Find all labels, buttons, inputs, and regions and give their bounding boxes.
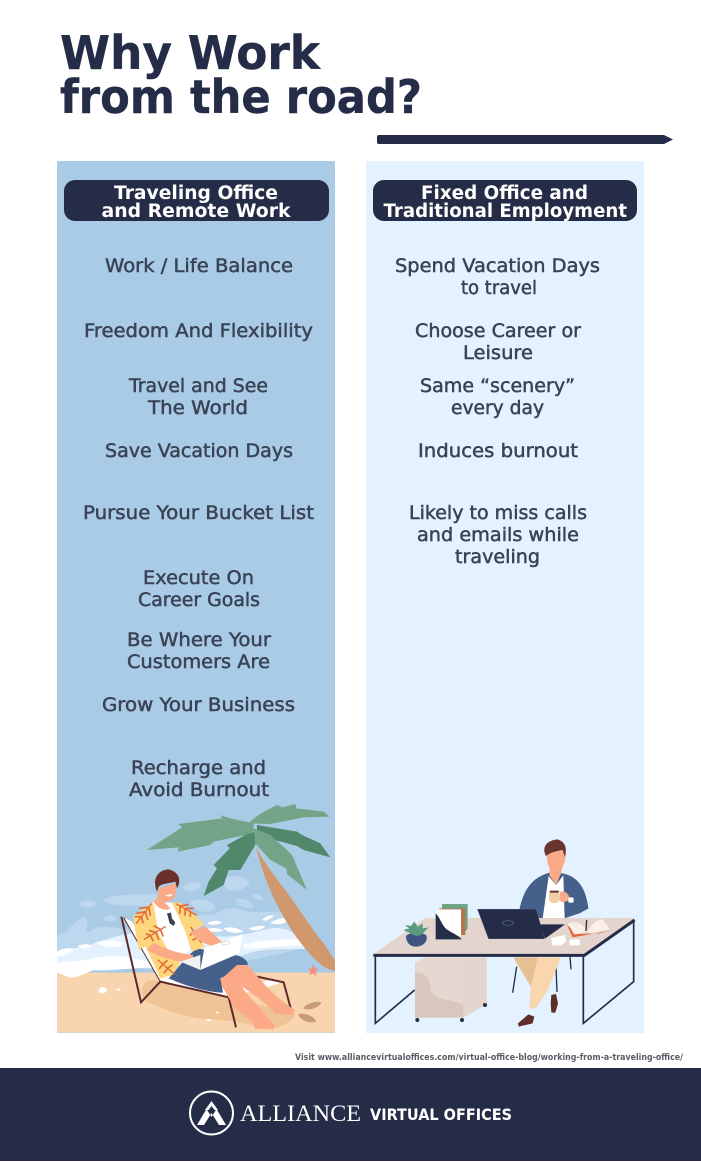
sea waves — [57, 908, 312, 973]
benefits list: Work / Life Balance — [105, 255, 293, 277]
hair — [544, 839, 566, 857]
shorts — [169, 948, 248, 993]
panel: traveling office — [57, 161, 335, 1033]
drawbacks list: Leisure — [463, 342, 533, 364]
title: Why Work — [60, 26, 321, 80]
laptop — [200, 934, 243, 970]
drawbacks list: and emails while — [417, 524, 579, 546]
drawbacks list: Same “scenery” — [420, 375, 575, 397]
drawbacks list: Induces burnout — [418, 440, 578, 462]
benefits list: Avoid Burnout — [129, 779, 269, 801]
logo wordmark: ALLIANCE — [240, 1101, 361, 1126]
benefits list: The World — [147, 397, 248, 419]
heading: traveling office: Traveling Office — [114, 183, 278, 204]
source link: Visit www.alliancevirtualoffices.com/virtual-office-blog/working-from-a-traveling-office/ — [295, 1053, 684, 1063]
shirt leaves — [135, 904, 201, 974]
title: from the road? — [60, 70, 422, 124]
drawbacks list: traveling — [455, 546, 540, 568]
palm trunk — [256, 847, 335, 971]
benefits list: Execute On — [143, 567, 254, 589]
benefits list: Grow Your Business — [102, 694, 295, 716]
benefits list: Be Where Your — [127, 629, 271, 651]
thigh — [220, 965, 295, 1015]
desk top — [373, 918, 635, 954]
benefits list: Save Vacation Days — [105, 440, 293, 462]
benefits list: Customers Are — [127, 651, 270, 673]
sunglasses — [167, 913, 175, 926]
deck chair frame — [121, 917, 291, 1027]
foam — [57, 928, 312, 977]
heading: fixed office: Traditional Employment — [384, 201, 627, 222]
panel: fixed office — [366, 161, 644, 1033]
benefits list: Freedom And Flexibility — [84, 320, 313, 342]
papers — [551, 935, 580, 945]
open notebook — [567, 919, 611, 937]
logo wordmark — [240, 1101, 512, 1126]
lower leg — [219, 975, 274, 1029]
sand shadow — [142, 980, 295, 1029]
jacket — [519, 873, 588, 918]
chair legs — [513, 957, 571, 993]
arm — [573, 898, 588, 913]
sand — [57, 973, 335, 1033]
drawer cabinet — [415, 957, 487, 1022]
trousers — [513, 957, 561, 1008]
drawbacks list: to travel — [461, 277, 537, 299]
illustration: man at office desk — [373, 839, 635, 1027]
drawbacks list — [395, 255, 600, 568]
white tee — [153, 902, 190, 957]
benefits list: Recharge and — [131, 757, 266, 779]
heading: fixed office — [373, 180, 637, 222]
head — [154, 883, 176, 910]
benefits list: Career Goals — [138, 589, 260, 611]
palm fronds — [147, 815, 254, 852]
benefits list: Pursue Your Bucket List — [83, 502, 314, 524]
laptop — [478, 909, 565, 939]
shoes — [551, 994, 558, 1013]
sandals — [299, 1002, 321, 1022]
logo wordmark: VIRTUAL OFFICES — [370, 1105, 512, 1124]
potted plant — [403, 922, 429, 947]
shirt — [133, 902, 180, 978]
drawbacks list: Choose Career or — [415, 320, 581, 342]
heading: traveling office — [64, 180, 329, 222]
logo icon — [190, 1092, 233, 1134]
coffee mug and hand — [549, 891, 574, 903]
desk edge and legs — [373, 920, 635, 955]
footer band — [0, 1068, 701, 1161]
starfish — [308, 964, 319, 976]
hair — [155, 869, 179, 892]
benefits list: Travel and See — [128, 375, 268, 397]
smile — [165, 894, 173, 897]
shirt — [543, 875, 565, 918]
title — [60, 26, 422, 124]
shell and pebbles — [99, 987, 107, 993]
drawbacks list: Spend Vacation Days — [395, 255, 600, 277]
binders — [436, 904, 468, 939]
drawbacks list: Likely to miss calls — [409, 502, 587, 524]
benefits list — [83, 255, 314, 801]
drawbacks list: every day — [451, 397, 544, 419]
heading: fixed office: Fixed Office and — [421, 183, 588, 204]
deck chair canvas — [124, 918, 283, 997]
illustration: man on beach with laptop — [57, 804, 335, 1033]
title accent bar — [377, 135, 673, 144]
neck and head — [549, 867, 563, 885]
arm — [147, 926, 222, 962]
heading: traveling office: and Remote Work — [102, 201, 291, 222]
